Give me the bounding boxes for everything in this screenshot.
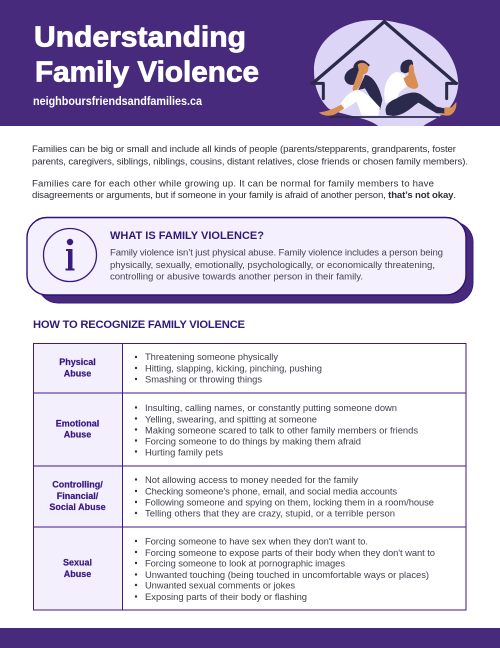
intro paragraph 2: disagreements or arguments, but if someone in your family is afraid of another person, that’s not okay. bbox=[32, 190, 456, 201]
row: controlling, financial and social abuse: Financial/ bbox=[57, 491, 99, 501]
callout text: Family violence isn’t just physical abuse. Family violence includes a person being bbox=[110, 248, 443, 258]
title: Understanding bbox=[34, 22, 246, 54]
table: types of family violence bbox=[34, 344, 466, 610]
title: Family Violence bbox=[35, 56, 259, 88]
row: sexual abuse: Sexual bbox=[63, 558, 92, 568]
row: controlling, financial and social abuse: Controlling/ bbox=[52, 480, 103, 490]
website url: neighboursfriendsandfamilies.ca bbox=[33, 94, 202, 108]
row: physical abuse: Threatening someone physically bbox=[145, 351, 278, 362]
row: sexual abuse: Exposing parts of their body or flashing bbox=[145, 591, 307, 602]
title bbox=[34, 22, 259, 88]
row: sexual abuse: Abuse bbox=[64, 569, 91, 579]
callout text bbox=[110, 248, 443, 282]
icon: information bbox=[44, 228, 96, 282]
row: emotional abuse: Hurting family pets bbox=[145, 446, 223, 458]
row: physical abuse: Hitting, slapping, kicking, pinching, pushing bbox=[145, 362, 322, 374]
row: controlling, financial and social abuse: Following someone and spying on them, locking them in a room/house bbox=[145, 496, 434, 508]
intro paragraph 2 bbox=[32, 178, 456, 201]
row: controlling, financial and social abuse: Social Abuse bbox=[49, 502, 106, 512]
intro paragraph 1 bbox=[32, 144, 468, 168]
row: sexual abuse: Forcing someone to have sex when they don't want to. bbox=[145, 536, 368, 546]
footer band bbox=[0, 628, 500, 648]
intro paragraph 1: parents, caregivers, siblings, niblings, cousins, distant relatives, close friends or chosen family members). bbox=[32, 156, 468, 168]
illustration: couple sitting back to back under a house roof bbox=[312, 20, 458, 126]
row: sexual abuse: Unwanted touching (being touched in uncomfortable ways or places) bbox=[145, 569, 429, 580]
intro paragraph 1: Families can be big or small and include all kinds of people (parents/stepparents, grandparents, foster bbox=[32, 144, 457, 155]
row: emotional abuse bbox=[56, 402, 418, 458]
row: physical abuse: Physical bbox=[59, 357, 96, 367]
callout: what is family violence bbox=[27, 218, 473, 303]
row: sexual abuse: Unwanted sexual comments or jokes bbox=[145, 580, 295, 590]
row: sexual abuse bbox=[63, 536, 435, 602]
row: emotional abuse: Abuse bbox=[64, 430, 91, 440]
row: controlling, financial and social abuse: Not allowing access to money needed for the family bbox=[145, 474, 358, 485]
row: emotional abuse: Insulting, calling names, or constantly putting someone down bbox=[145, 402, 397, 413]
row: physical abuse: Abuse bbox=[64, 368, 91, 378]
row: controlling, financial and social abuse bbox=[49, 474, 434, 518]
row: sexual abuse: Forcing someone to expose parts of their body when they don't want to bbox=[145, 547, 435, 558]
row: sexual abuse: Forcing someone to look at pornographic images bbox=[145, 558, 345, 568]
row: emotional abuse: Emotional bbox=[56, 418, 99, 428]
row: controlling, financial and social abuse: Telling others that they are crazy, stupid, or a terrible person bbox=[145, 508, 395, 518]
intro paragraph 2: Families care for each other while growing up. It can be normal for family members to have bbox=[32, 178, 434, 190]
row: physical abuse: Smashing or throwing things bbox=[145, 374, 262, 384]
row: emotional abuse: Yelling, swearing, and spitting at someone bbox=[145, 414, 317, 424]
row: emotional abuse: Making someone scared to talk to other family members or friends bbox=[145, 424, 418, 436]
row: controlling, financial and social abuse: Checking someone’s phone, email, and social media accounts bbox=[145, 486, 397, 496]
section heading: HOW TO RECOGNIZE FAMILY VIOLENCE bbox=[33, 319, 246, 331]
row: physical abuse bbox=[59, 351, 322, 384]
callout heading: WHAT IS FAMILY VIOLENCE? bbox=[110, 230, 264, 242]
header band bbox=[0, 0, 500, 126]
callout text: physically, sexually, emotionally, psychologically, or economically threatening, bbox=[110, 260, 435, 271]
callout text: controlling or abusive towards another person in their family. bbox=[110, 272, 363, 282]
row: emotional abuse: Forcing someone to do things by making them afraid bbox=[145, 436, 361, 446]
